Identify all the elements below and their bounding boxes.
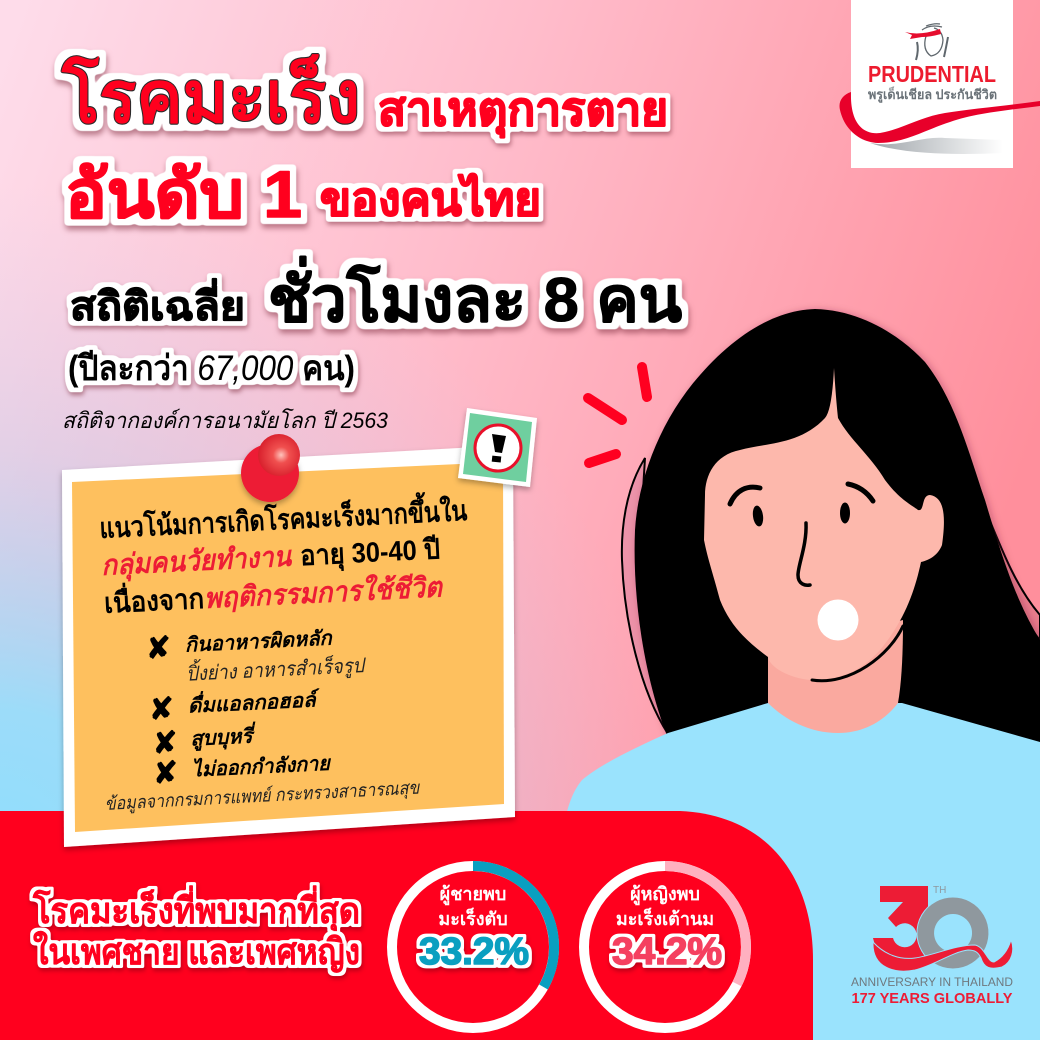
right eyebrow: [848, 484, 873, 501]
title line 1: สาเหตุการตาย: [378, 83, 668, 138]
neck: [768, 620, 903, 733]
donut: men, liver cancer: [392, 866, 554, 1028]
hair strand right: [972, 478, 1040, 640]
source: Department of Medical Services: ข้อมูลจากกรมการแพทย์ กระทรวงสาธารณสุข: [104, 777, 421, 815]
list: สูบบุหรี่: [190, 721, 257, 752]
donut: men, liver cancer: ผู้ชายพบ: [440, 884, 506, 906]
note card: [62, 408, 537, 847]
red panel: [0, 811, 813, 1040]
list: ดื่มแอลกอฮอล์: [187, 685, 321, 718]
logo: 30th anniversary: 177 YEARS GLOBALLY: [852, 990, 1012, 1007]
donut: men, liver cancer: 33.2%: [419, 931, 529, 973]
title line 2: ของคนไทย: [320, 173, 541, 225]
list: ไม่ออกกำลังกาย: [191, 751, 333, 782]
logo: 30th anniversary: ANNIVERSARY IN THAILAND: [851, 975, 1013, 989]
mouth: [818, 600, 858, 640]
logo: Prudential: PRUDENTIAL: [868, 61, 996, 87]
paper: [62, 445, 515, 847]
donut: women, breast cancer: มะเร็งเต้านม: [616, 907, 714, 929]
bottom heading: โรคมะเร็งที่พบมากที่สุด: [32, 885, 360, 934]
alert lines: [588, 367, 647, 463]
sub-statistic: (ปีละกว่า 67,000 คน): [68, 349, 355, 388]
hair: [635, 309, 1040, 760]
list: ✘: [145, 631, 172, 666]
headline: statistic: [70, 256, 682, 335]
face: [704, 368, 944, 680]
left eyebrow: [730, 487, 760, 504]
nose: [798, 523, 810, 585]
illustration: woman: [566, 309, 1040, 1040]
title line 2: อันดับ 1: [65, 157, 302, 231]
bottom heading: [32, 885, 360, 973]
logo: 30th anniversary: [851, 885, 1013, 1007]
list: ✘: [152, 726, 178, 760]
bottom heading: ในเพศชาย และเพศหญิง: [33, 930, 360, 973]
hair strand left: [622, 458, 672, 734]
donut: women, breast cancer: [584, 866, 746, 1028]
orange sheet: [72, 462, 504, 832]
donut: women, breast cancer: ผู้หญิงพบ: [630, 884, 700, 906]
list: ปิ้งย่าง อาหารสำเร็จรูป: [185, 650, 368, 687]
heading text: พฤติกรรมการใช้ชีวิต: [203, 570, 444, 614]
left eye: [752, 505, 764, 527]
heading text: แนวโน้มการเกิดโรคมะเร็งมากขึ้นใน: [98, 489, 468, 544]
headline: statistic: ชั่วโมงละ 8 คน: [268, 256, 682, 335]
list: [145, 622, 373, 790]
list: กินอาหารผิดหลัก: [184, 628, 334, 657]
source: WHO: สถิติจากองค์การอนามัยโลก ปี 2563: [62, 408, 389, 433]
right eye: [840, 502, 850, 524]
title line 2: [65, 157, 541, 231]
list: ✘: [152, 756, 179, 790]
icon: red pin: [241, 434, 300, 502]
icon: warning sticker: [458, 408, 537, 487]
chin line: [812, 626, 903, 681]
heading text: [98, 489, 472, 619]
list: ✘: [148, 692, 175, 727]
headline: statistic: สถิติเฉลี่ย: [70, 278, 245, 329]
heading text: อายุ 30-40 ปี: [299, 533, 441, 573]
heading text: กลุ่มคนวัยทำงาน: [101, 541, 294, 583]
logo: 30th anniversary: TH: [933, 885, 946, 896]
logo: Prudential: [839, 0, 1040, 168]
logo: Prudential: พรูเด็นเชียล ประกันชีวิต: [868, 85, 997, 103]
donut: men, liver cancer: มะเร็งตับ: [438, 907, 508, 929]
shirt: [566, 703, 1040, 1040]
title line 1: [61, 54, 668, 138]
donut: women, breast cancer: 34.2%: [612, 931, 722, 973]
heading text: เนื่องจาก: [103, 578, 205, 619]
title line 1: โรคมะเร็ง: [61, 54, 360, 138]
